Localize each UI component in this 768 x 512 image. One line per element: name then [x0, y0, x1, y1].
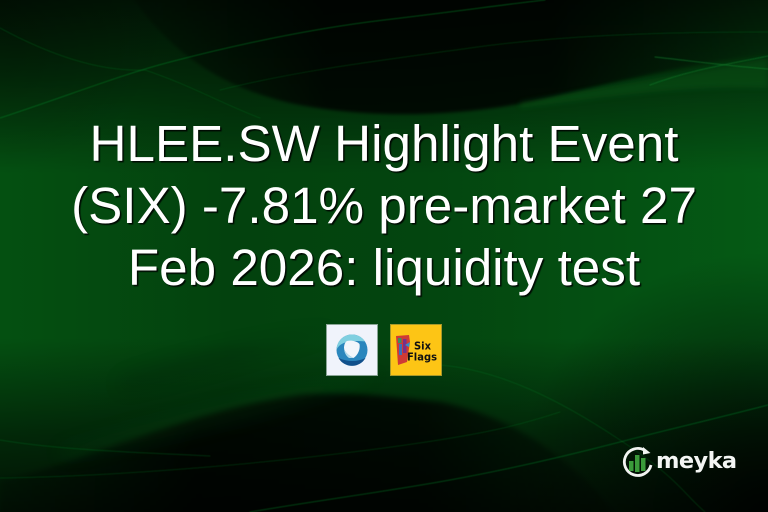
icon: meyka gauge mark: [622, 447, 652, 477]
title: HLEE.SW Highlight Event: [90, 115, 678, 172]
title: (SIX) -7.81% pre-market 27: [71, 177, 697, 234]
title: [71, 115, 697, 298]
icon: HLEE logo tile: [326, 324, 378, 376]
brand name: meyka: [656, 448, 737, 474]
icon: Six Flags logo tile: Flags: [407, 352, 437, 364]
icon: Six Flags logo tile: [390, 324, 442, 376]
icon: Six Flags logo tile: Six: [414, 340, 431, 352]
title: Feb 2026: liquidity test: [128, 239, 640, 296]
logo: meyka: [622, 447, 737, 477]
